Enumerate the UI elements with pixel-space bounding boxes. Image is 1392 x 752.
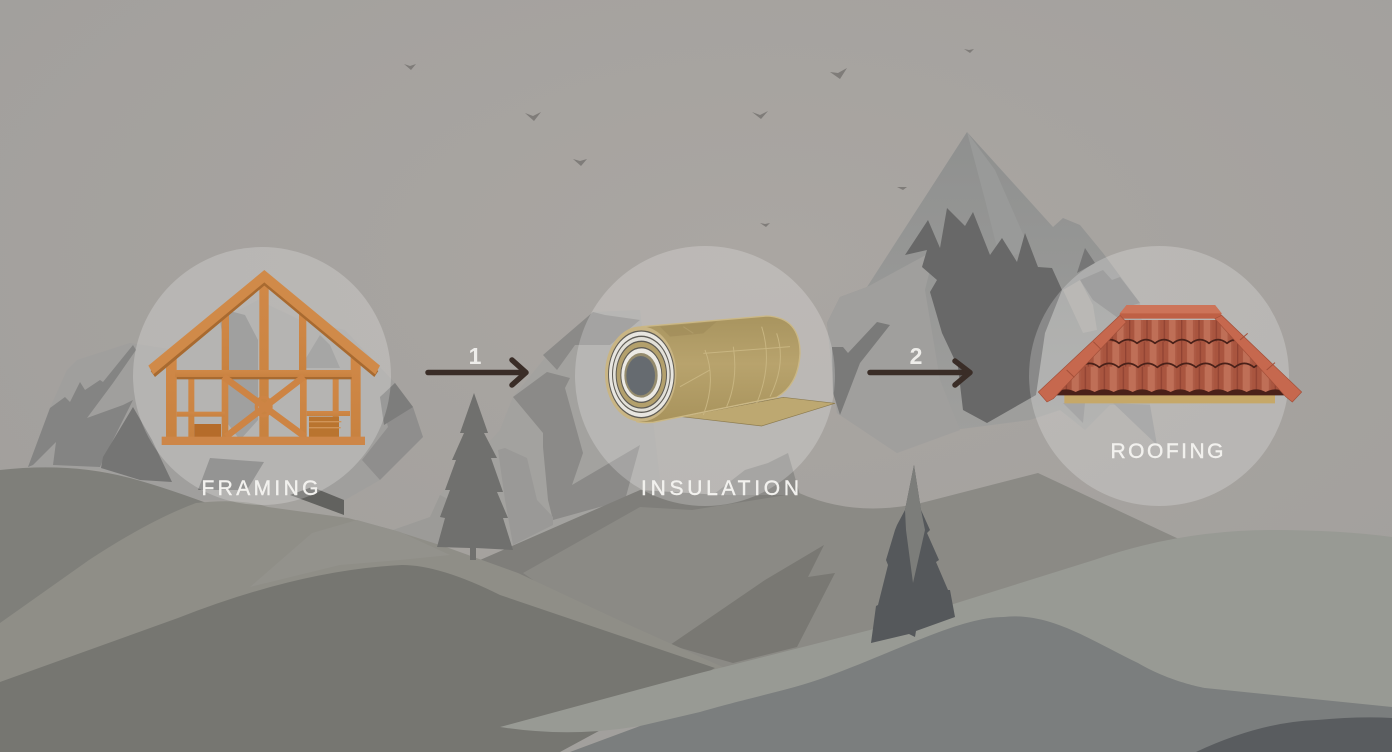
number 2: 2 bbox=[910, 343, 922, 369]
hill: dark corner bbox=[1196, 717, 1392, 752]
mountain shadow bbox=[905, 208, 1062, 423]
hill: back left bbox=[0, 467, 420, 752]
left mountains bbox=[28, 300, 423, 515]
tile course lines bbox=[1080, 340, 1273, 367]
hill: slate foreground bbox=[570, 616, 1392, 752]
central shadow bbox=[513, 372, 640, 520]
lower patch bbox=[393, 495, 450, 550]
central mountain bbox=[393, 310, 800, 550]
birds bbox=[404, 49, 974, 227]
circle: insulation bbox=[575, 246, 835, 506]
right hip bbox=[1215, 315, 1302, 402]
streak under roof right bbox=[1113, 403, 1157, 445]
hill: mid right bbox=[523, 473, 1181, 700]
roll end bbox=[605, 326, 676, 422]
lower shadow bbox=[832, 322, 890, 415]
hill: front left bbox=[0, 565, 715, 752]
big mountain bbox=[827, 132, 1157, 453]
hill: light band bbox=[0, 501, 725, 752]
lighter patch bbox=[498, 448, 553, 545]
icon: timber house frame bbox=[148, 270, 380, 445]
icon: clay roof tiles bbox=[1038, 305, 1302, 403]
dark mound in circle bbox=[700, 453, 800, 520]
hill crest highlight bbox=[250, 520, 450, 587]
hill: dark mid band bbox=[480, 490, 800, 590]
label: framing: FRAMING bbox=[202, 477, 318, 500]
label: insulation: INSULATION bbox=[641, 477, 799, 500]
sky gap in shoulder bbox=[1063, 280, 1097, 333]
arrow 1 bbox=[428, 360, 526, 385]
tree right bbox=[871, 465, 955, 643]
tile rows bbox=[1102, 320, 1242, 345]
hill shadow bbox=[670, 545, 835, 663]
circle: framing bbox=[133, 247, 391, 505]
arrow 2 bbox=[870, 361, 970, 385]
shoulder shadow bbox=[1077, 248, 1095, 273]
streak under roof bbox=[1063, 403, 1085, 423]
number 1: 1 bbox=[469, 343, 482, 369]
flap bbox=[682, 397, 835, 426]
fascia board bbox=[1064, 394, 1275, 403]
hill: light foreground bbox=[500, 530, 1392, 752]
upper streak bbox=[543, 312, 640, 370]
roll body bbox=[630, 316, 800, 423]
icon: insulation roll bbox=[605, 316, 835, 426]
left hip bbox=[1038, 315, 1126, 402]
tree left bbox=[437, 393, 513, 560]
dark lump bbox=[101, 407, 172, 482]
circle: roofing bbox=[1029, 246, 1289, 506]
label: roofing: ROOFING bbox=[1110, 440, 1224, 463]
ridge cap bbox=[1120, 305, 1222, 319]
